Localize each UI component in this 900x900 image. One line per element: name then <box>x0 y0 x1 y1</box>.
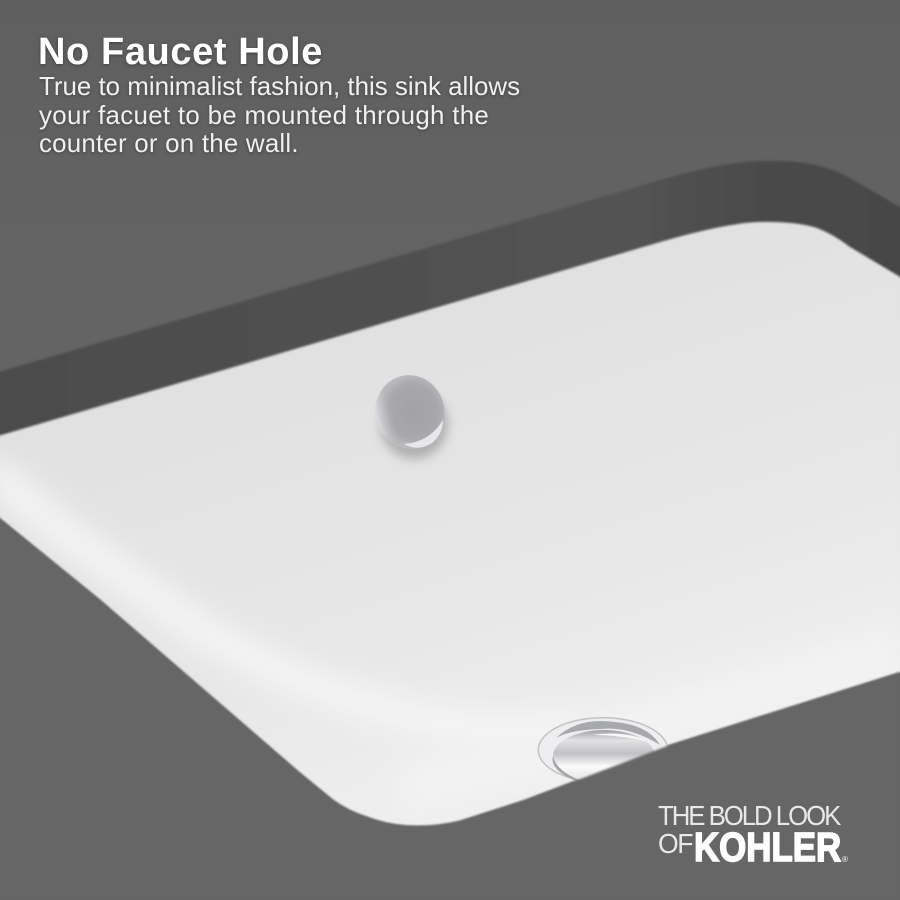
description text <box>39 73 520 158</box>
icon: drain <box>538 717 668 783</box>
description text: your facuet to be mounted through the <box>39 102 489 130</box>
logo tagline: THE BOLD LOOK <box>658 800 839 831</box>
soft highlight band <box>0 465 404 716</box>
description text: True to minimalist fashion, this sink allows <box>39 73 520 101</box>
logo: The Bold Look of Kohler <box>658 800 848 870</box>
basin interior <box>0 200 900 850</box>
illustration: undermount sink <box>0 160 900 827</box>
inner wall of basin opening <box>0 161 900 450</box>
icon: overflow stopper <box>369 369 451 459</box>
description text: counter or on the wall. <box>39 130 299 158</box>
counter in front of basin <box>0 517 900 900</box>
logo wordmark: KOHLER <box>694 824 841 870</box>
registered mark: ® <box>842 855 848 864</box>
title: No Faucet Hole <box>38 31 323 73</box>
logo "OF": OF <box>658 828 692 859</box>
